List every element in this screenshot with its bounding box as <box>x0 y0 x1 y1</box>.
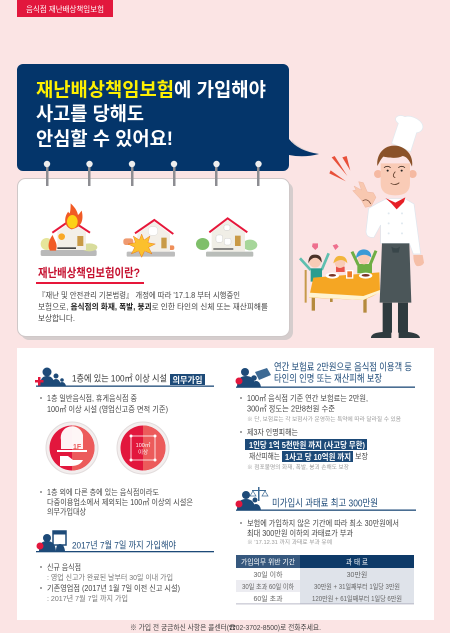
notebook heading: 재난배상책임보험이란? <box>38 265 140 280</box>
category tag <box>17 0 113 17</box>
text: premium: ※ 단, 보험료는 각 보험사가 운영하는 특약에 따라 달라질 수 있음 <box>247 415 401 423</box>
notebook panel <box>18 178 293 340</box>
penalty table: 과 태 료 <box>346 558 368 566</box>
notebook rings <box>44 161 262 186</box>
text: premium: 100㎡ 음식점 기준 연간 보험료는 2만원, <box>247 393 368 403</box>
chef <box>353 116 424 338</box>
penalty table: 120만원 + 61일째부터 1일당 6만원 <box>312 594 402 603</box>
text: penalty description: 최대 300만원 이하의 과태료가 부과 <box>247 528 354 538</box>
chef and family illustration <box>300 116 424 338</box>
text: compensation limits: 보장 <box>355 451 369 461</box>
text: other floors: 1층 외에 다른 층에 있는 음식점이라도 <box>47 487 159 497</box>
text: compensation limits: 재산피해는 <box>249 451 280 461</box>
icon: 100 square metre circle <box>117 422 169 474</box>
text: penalty description: ※ '17.12.31 까지 과태료 부과 유예 <box>247 538 332 546</box>
notebook heading <box>36 265 144 284</box>
text: eligibility: 1층 일반음식점, 휴게음식점 중 <box>47 393 137 403</box>
house collapse <box>196 218 257 257</box>
penalty table <box>236 555 414 604</box>
text: deadlines <box>40 562 180 603</box>
heading: 타인의 인명 또는 재산피해 보장 <box>274 372 382 385</box>
text: other floors <box>40 487 193 516</box>
house fire <box>41 203 97 256</box>
title speech bubble <box>17 64 319 171</box>
category tag: 음식점 재난배상책임보험 <box>26 4 104 14</box>
family at table <box>300 243 380 313</box>
title speech bubble: 재난배상책임보험 <box>36 79 174 101</box>
text: deadlines: 신규 음식점 <box>47 562 81 572</box>
footer note: ※ 가입 전 궁금하신 사항은 콜센터(☎02-3702-8500)로 전화주세요. <box>130 622 321 632</box>
notebook body text <box>38 290 268 323</box>
text: compensation limits: ※ 점포불명의 화재, 폭발, 붕괴 손해도 보장 <box>247 463 349 471</box>
text: other floors: 의무가입대상 <box>47 506 87 516</box>
section: mandatory enrollment <box>35 368 214 516</box>
text: deadlines: : 2017년 7월 7일 까지 가입 <box>47 593 128 603</box>
text: premium: 300㎡ 정도는 2만8천원 수준 <box>247 404 335 414</box>
heading: 미가입시 과태료 최고 300만원 <box>272 496 378 510</box>
penalty table: 60일 초과 <box>253 594 283 603</box>
text: compensation limits: 1인당 1억 5천만원 까지 (사고당 무한) <box>249 440 365 450</box>
text: other floors: 다중이용업소에서 제외되는 100㎡ 이상의 시설은 <box>47 497 193 507</box>
title speech bubble: 안심할 수 있어요! <box>36 128 173 150</box>
text: compensation limits: 제3자 인명피해는 <box>247 427 298 437</box>
penalty table: 가입의무 위반 기간 <box>241 556 295 566</box>
text: eligibility: 100㎡ 이상 시설 (영업신고증 면적 기준) <box>47 404 168 414</box>
heading: 1층에 있는 100㎡ 이상 시설 <box>72 372 167 384</box>
text: eligibility <box>40 393 168 414</box>
information panel <box>17 348 434 620</box>
text: deadlines: : 영업 신고가 완료된 날부터 30일 이내 가입 <box>47 572 173 582</box>
section: coverage <box>236 362 415 471</box>
emphasis marks <box>329 156 350 181</box>
text: deadlines: 기존영업점 (2017년 1월 7일 이전 신고 시설) <box>47 583 180 593</box>
icon: people and money <box>236 368 271 387</box>
section: deadline <box>36 531 214 603</box>
icon: people and scales <box>236 487 268 510</box>
icon: first floor circle <box>46 422 98 474</box>
section: penalty <box>236 487 416 604</box>
notebook body text: 보상합니다. <box>38 313 75 323</box>
heading: 연간 보험료 2만원으로 음식점 이용객 등 <box>274 362 412 374</box>
title speech bubble: 에 가입해야 <box>174 79 266 101</box>
title speech bubble: 사고를 당해도 <box>36 103 144 125</box>
icon: 100 square metre circle: 이상 <box>138 448 148 456</box>
heading: 의무가입 <box>172 375 202 385</box>
notebook body text: 보험으로, 음식점의 화재, 폭발, 붕괴로 인한 타인의 신체 또는 재산피해를 <box>38 302 268 312</box>
notebook body text: 『재난 및 안전관리 기본법령』 개정에 따라 '17.1.8 부터 시행중인 <box>38 290 240 300</box>
icon: first floor circle: 1F <box>73 444 82 451</box>
house explosion <box>123 220 175 257</box>
text: penalty description: 보험에 가입하지 않은 기간에 따라 최소 30만원에서 <box>247 518 399 528</box>
text: compensation limits <box>240 427 369 471</box>
icon: people with plus <box>35 368 66 386</box>
heading <box>236 362 415 388</box>
icon: calendar and people <box>36 531 66 551</box>
house icons <box>41 203 257 257</box>
penalty table: 30일 이하 <box>253 570 283 579</box>
text: premium <box>240 393 401 423</box>
penalty table: 30만원 + 31일째부터 1일당 3만원 <box>314 582 400 591</box>
heading: 2017년 7월 7일 까지 가입해야 <box>72 540 176 552</box>
text: compensation limits: 1사고 당 10억원 까지 <box>285 452 351 462</box>
text: penalty description <box>240 518 399 546</box>
penalty table: 30일 초과 60일 이하 <box>242 582 294 591</box>
penalty table: 30만원 <box>347 570 367 579</box>
heading <box>36 372 214 387</box>
icon: 100 square metre circle: 100㎡ <box>136 441 151 449</box>
